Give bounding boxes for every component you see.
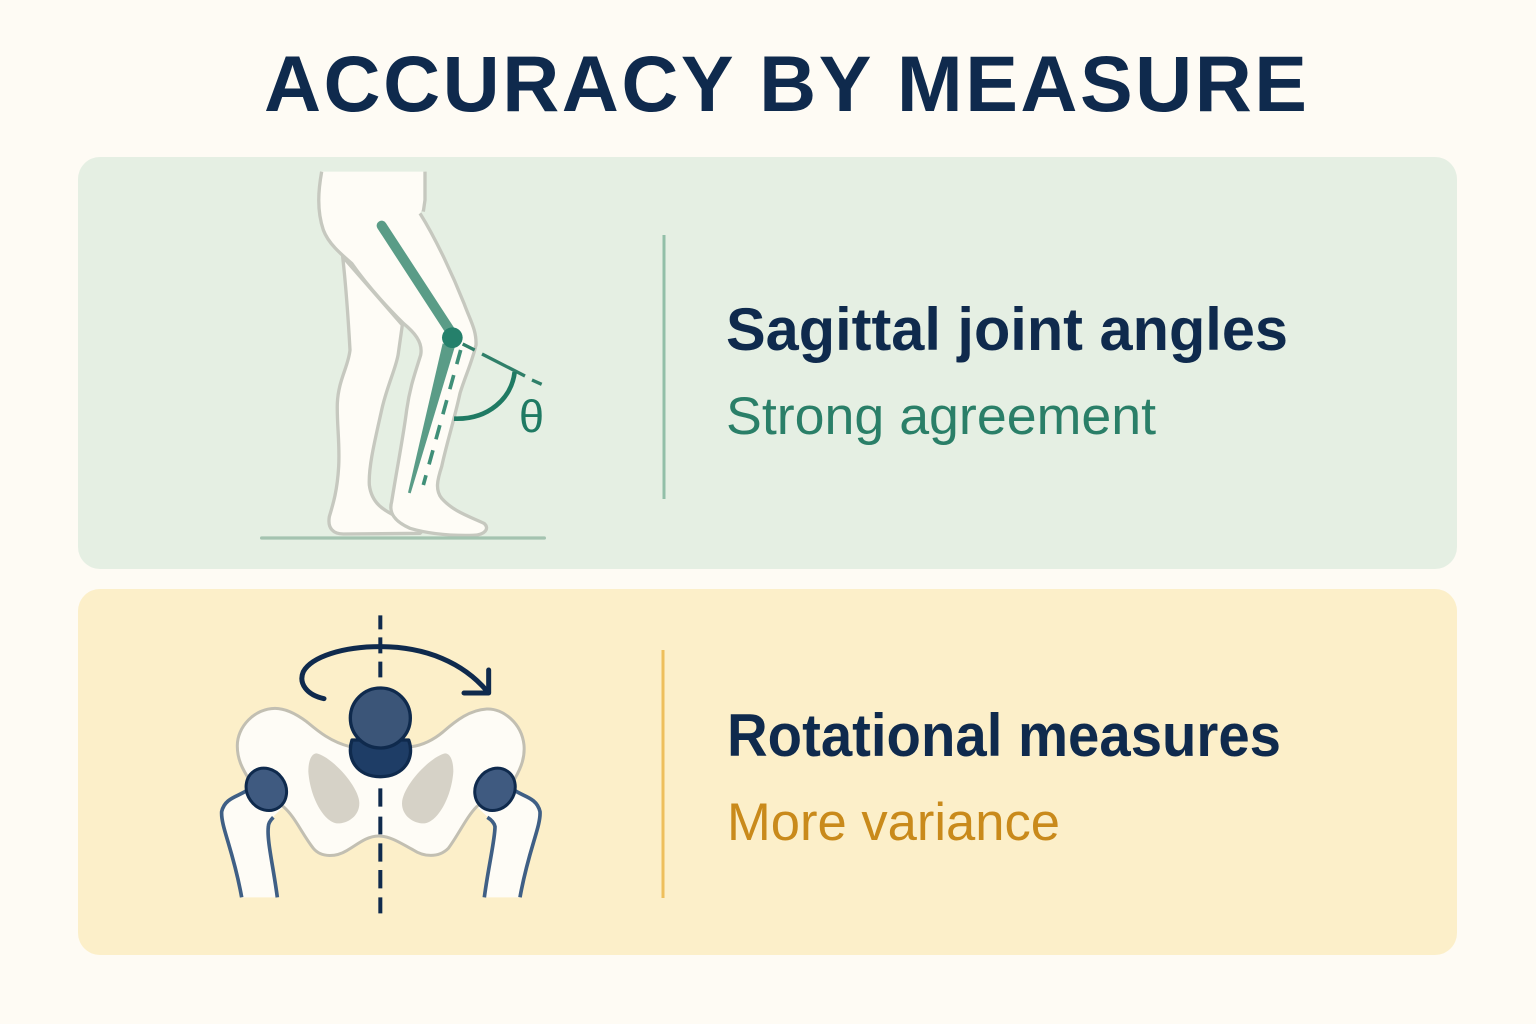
vertical axis <box>374 615 386 913</box>
thigh segment <box>382 226 451 332</box>
front leg <box>319 172 487 535</box>
left hip joint <box>238 760 295 818</box>
right femur <box>477 788 540 897</box>
right foramen <box>402 753 453 823</box>
rear leg <box>329 257 427 534</box>
shin reference dashed line <box>423 350 461 485</box>
title: ACCURACY BY MEASURE <box>264 39 1307 128</box>
heading: Sagittal joint angles <box>726 296 1288 363</box>
extended thigh dashed line <box>463 344 542 384</box>
knee joint <box>442 327 463 348</box>
subheading: Strong agreement <box>726 387 1156 446</box>
right hip joint <box>467 760 523 818</box>
rotation arrow <box>302 647 489 699</box>
shin segment <box>408 343 455 493</box>
illustration: pelvis with rotation <box>222 615 540 913</box>
left foramen <box>308 753 359 823</box>
angle arc <box>454 372 515 419</box>
lower sacrum <box>350 740 411 777</box>
subheading: More variance <box>727 793 1060 852</box>
panel: sagittal joint angles <box>78 157 1457 569</box>
upper sacrum <box>350 688 410 748</box>
theta label: θ <box>519 391 544 442</box>
left femur <box>222 788 283 897</box>
divider <box>662 650 664 898</box>
illustration: leg with knee angle <box>262 172 544 538</box>
heading: Rotational measures <box>727 702 1281 769</box>
divider <box>662 235 666 499</box>
ground line <box>262 533 544 543</box>
pelvis outline <box>237 708 524 856</box>
panel: rotational measures <box>78 589 1457 955</box>
